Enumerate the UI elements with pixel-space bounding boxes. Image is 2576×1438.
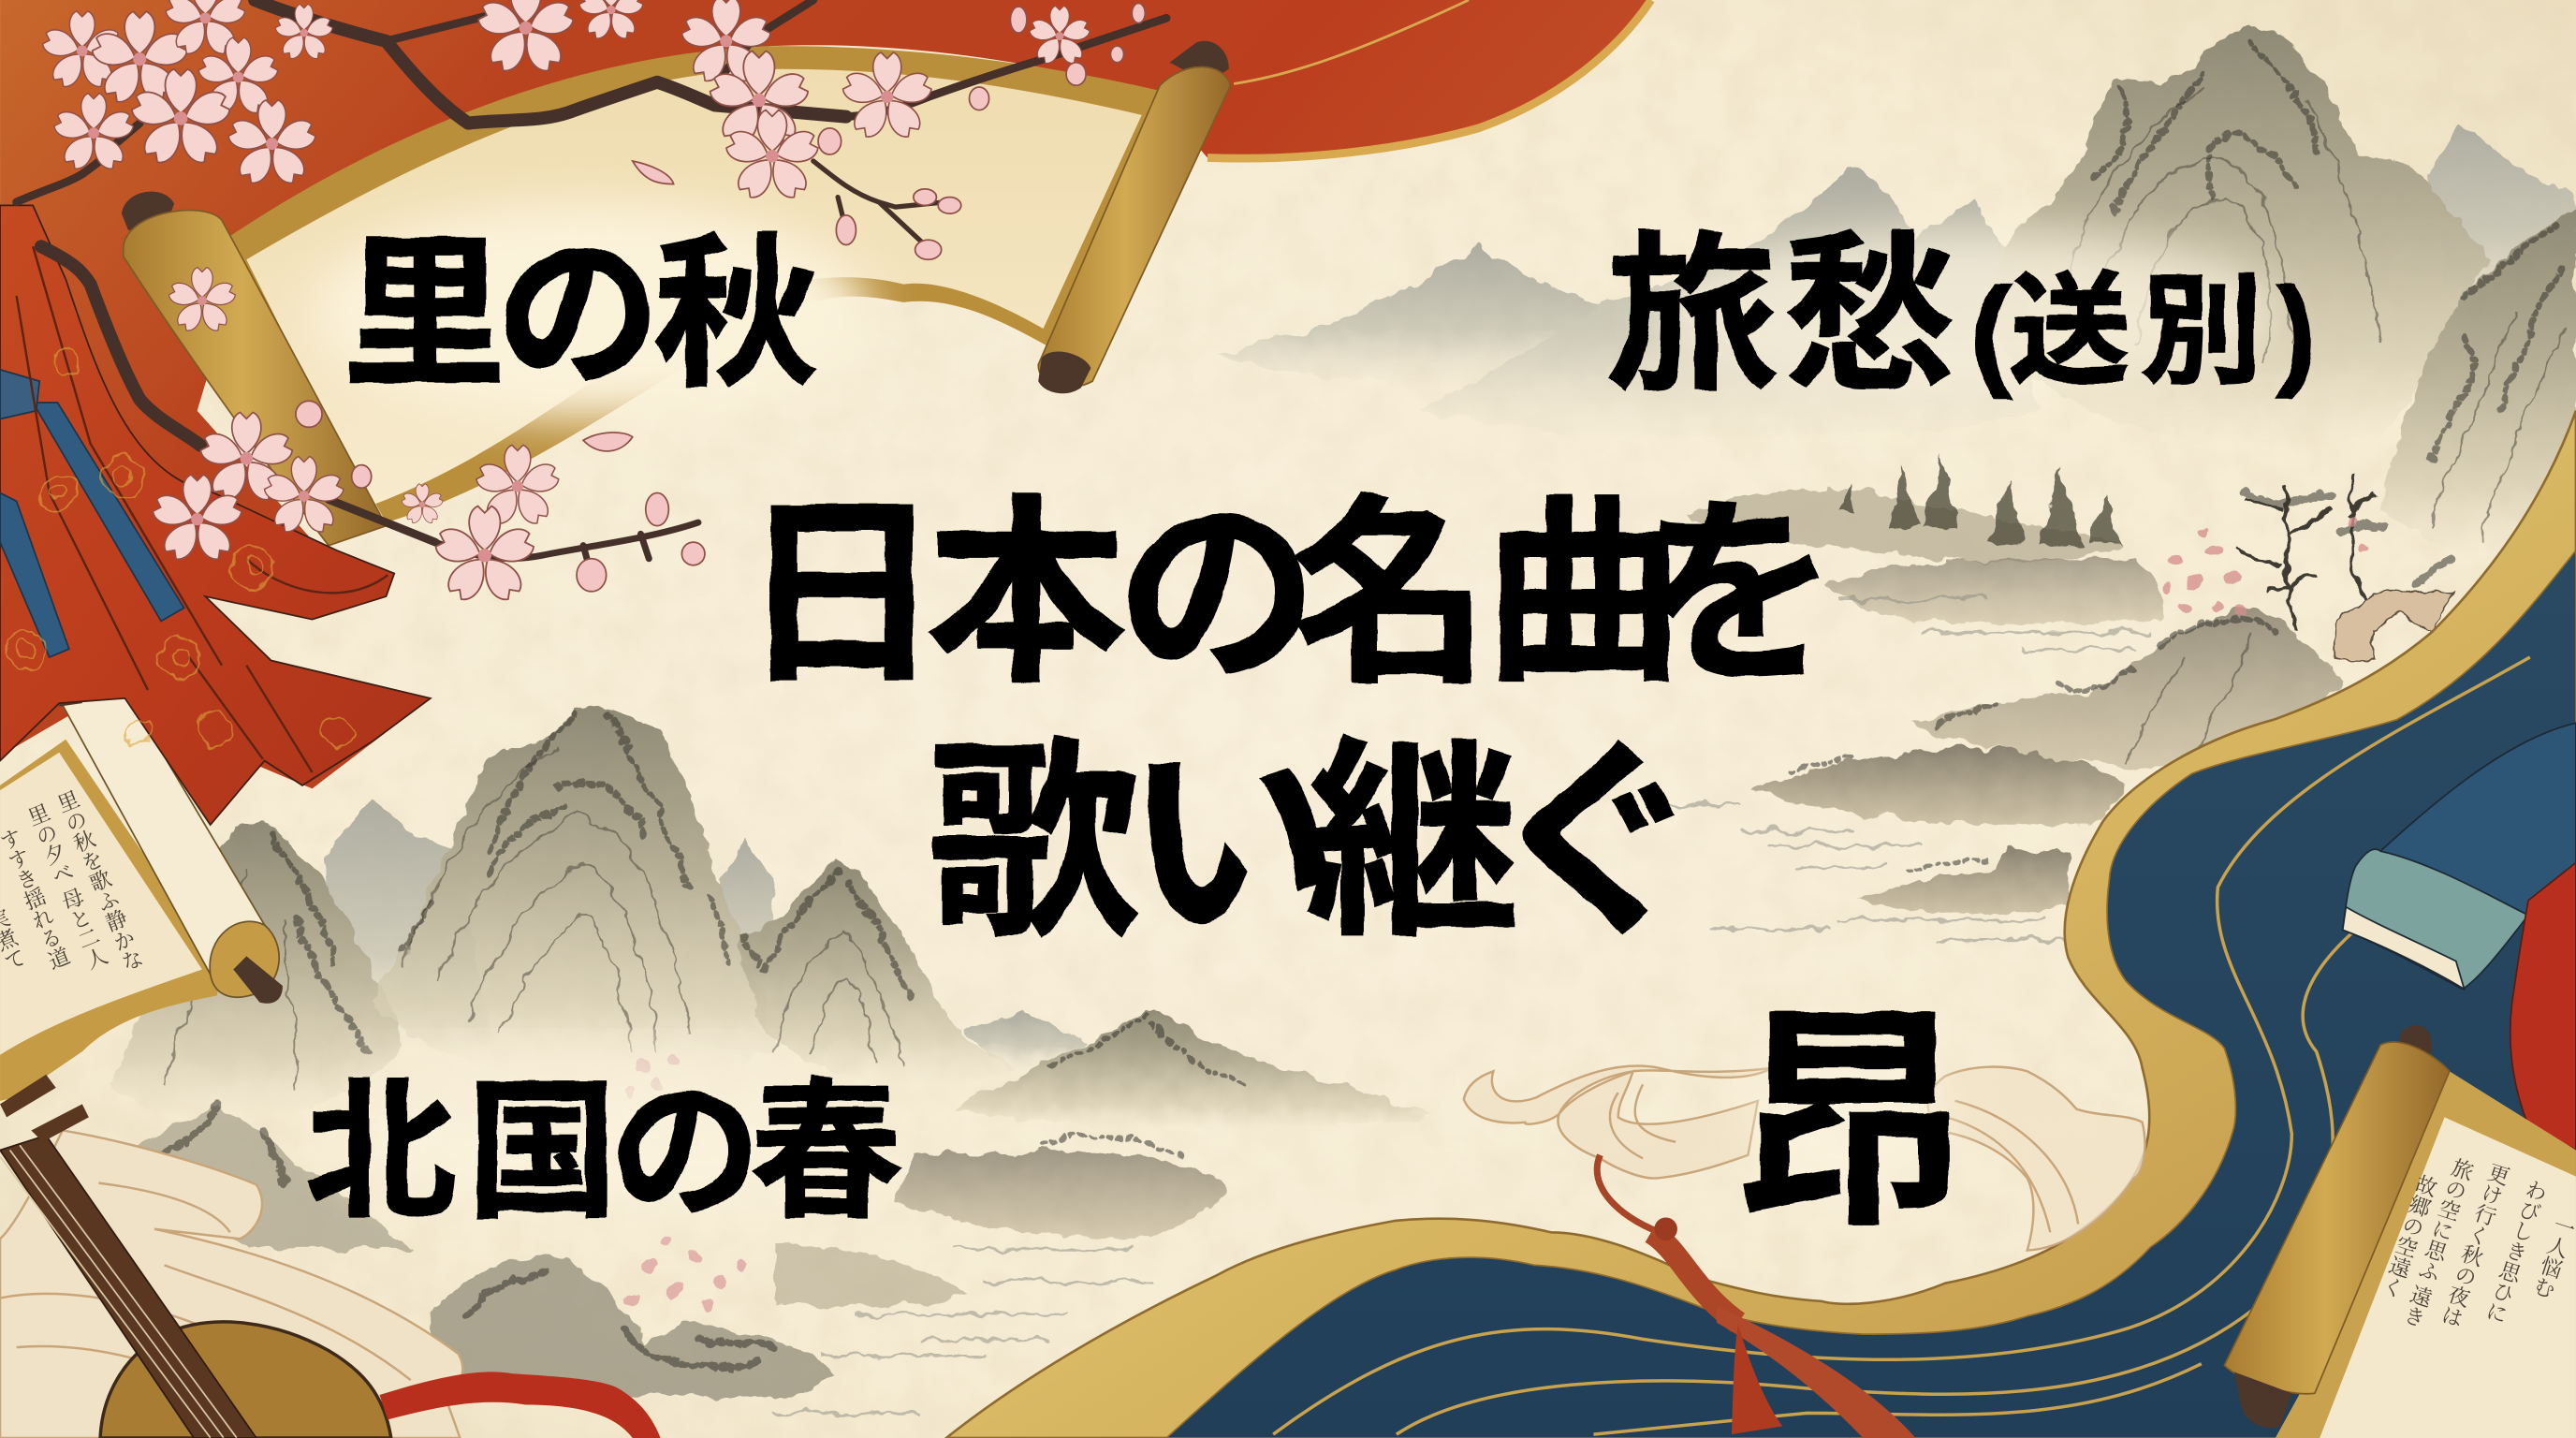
landscape: low islands on the river	[1651, 747, 2128, 940]
cloud swirl bottom left	[0, 1130, 462, 1438]
landscape: lower left hills and lake shore	[131, 1047, 1227, 1413]
main title line 1: 日本の名曲を	[741, 483, 1838, 707]
text glow: soft paper halos behind headings	[329, 230, 2276, 1212]
scroll left roller	[122, 192, 386, 546]
heading: 北国の春: 北国の春	[305, 1068, 902, 1237]
heading: 旅愁(送別): 旅愁	[1606, 220, 1955, 411]
blossoms: cherry flowers	[40, 0, 1145, 605]
scroll text	[0, 787, 146, 975]
scroll right roller	[1038, 41, 1231, 393]
landscape: rocky hill with trees and house	[1910, 477, 2456, 769]
scroll: large top scroll	[122, 41, 1231, 546]
cloud swirl behind the character	[1464, 1065, 2144, 1251]
gold trim on red drapery	[1208, 0, 1651, 158]
landscape: second centre peak	[738, 861, 1017, 1085]
landscape: main upper right peak	[1980, 26, 2491, 447]
tassel: red cord	[1597, 1155, 1915, 1438]
scroll: lower right scroll with text	[2224, 1025, 2576, 1438]
scroll text: 里の夕べ 母と二人	[22, 800, 110, 973]
scroll text: 里の秋を歌ふ静かな	[51, 787, 146, 975]
red ribbon	[379, 1372, 661, 1438]
cloth: robe sleeve left	[0, 205, 431, 825]
scroll text	[2378, 1154, 2576, 1329]
landscape: left cliff	[109, 822, 404, 1119]
main title line 2: 歌い継ぐ	[929, 724, 1704, 962]
landscape: far misty mountains upper right	[1218, 124, 2576, 438]
scroll text: わびしき思ひに	[2481, 1176, 2550, 1326]
robe: blue sleeve on the right edge	[2343, 723, 2576, 1151]
heading: 旅愁(送別)	[1606, 220, 2317, 411]
heading: 里の秋: 里の秋	[342, 224, 818, 407]
gold band	[946, 411, 2576, 1438]
heading: 旅愁(送別): (送別)	[1971, 262, 2317, 399]
landscape: right cliff	[2378, 209, 2576, 559]
instrument: lute	[0, 1075, 661, 1438]
landscape: main centre peak	[370, 705, 775, 1081]
scroll text: 一人悩む	[2528, 1212, 2576, 1300]
heading: 昂: 昂	[1734, 991, 1969, 1253]
blue water	[1166, 550, 2576, 1438]
scroll text: 更け行く秋の夜は	[2437, 1160, 2511, 1329]
river: blue and gold wave	[946, 411, 2576, 1438]
landscape: distant mountains centre left	[313, 800, 1429, 1129]
scroll paper and gold border	[227, 46, 1158, 522]
scroll: small left scroll with text	[0, 687, 283, 1101]
branches: cherry tree	[17, 0, 1166, 575]
scroll text: 故郷の空遠く	[2378, 1171, 2439, 1300]
landscape: mid distance pine island	[1686, 453, 2165, 649]
scroll text: 旅の空に思ふ 遠き	[2399, 1154, 2476, 1329]
cloth: red drapery top	[0, 0, 1651, 788]
